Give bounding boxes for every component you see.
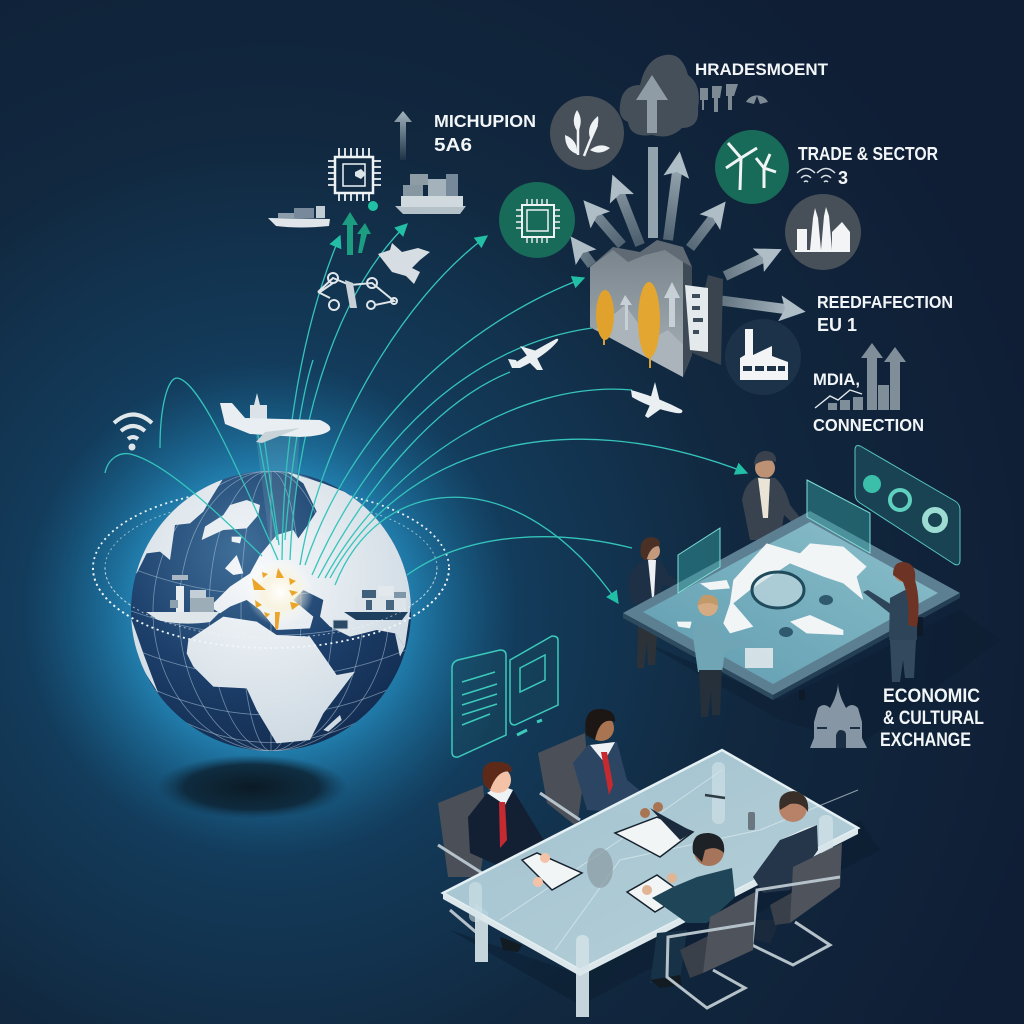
person: center businessman body — [573, 709, 660, 822]
network icon — [318, 273, 397, 310]
person: left businessman body — [468, 762, 563, 883]
person: front man — [642, 833, 735, 988]
person: center man — [692, 595, 752, 717]
icon: cargo ship top — [395, 174, 466, 214]
conference room floor shadow — [450, 820, 880, 1005]
icon: airplane over globe — [220, 393, 330, 443]
label: ECONOMIC & CULTURAL EXCHANGE: EXCHANGE — [880, 730, 971, 751]
label: HRADESMOENT: HRADESMOENT — [695, 60, 829, 79]
label: REEDFAFECTION — [817, 292, 953, 335]
globe cargo ship right — [333, 586, 408, 629]
circle icon: wheat — [550, 96, 624, 170]
label: REEDFAFECTION: EU 1 — [817, 315, 857, 335]
cloud with up arrow — [620, 55, 699, 136]
green arrows — [342, 212, 371, 255]
holographic panels — [678, 446, 960, 593]
documents on table — [522, 802, 693, 912]
icon: ship top left — [268, 206, 330, 228]
icon: chip outline — [328, 148, 381, 201]
label: MICHUPION — [434, 111, 536, 155]
holographic documents — [452, 636, 558, 757]
table lens — [745, 572, 833, 668]
bar chart label: MDIA CONNECTION — [813, 343, 924, 435]
table map land — [677, 543, 867, 635]
glass conference table — [443, 750, 858, 1017]
meeting table: map — [623, 511, 960, 700]
circle icon: wind turbine — [715, 130, 789, 204]
globe explosion highlight — [248, 568, 313, 630]
icon: wifi — [114, 414, 152, 450]
label: ECONOMIC & CULTURAL EXCHANGE: ECONOMIC — [883, 686, 980, 707]
airplane mid 2 — [631, 382, 682, 418]
airplane mid 1 — [508, 339, 558, 370]
chairs behind table — [438, 733, 587, 952]
label: ECONOMIC & CULTURAL EXCHANGE — [880, 686, 984, 751]
chair: front — [667, 892, 755, 1008]
teal dot — [368, 201, 378, 211]
person: right man — [753, 791, 818, 943]
circle icon: factory — [725, 319, 801, 395]
person: top presenter — [742, 451, 802, 540]
label: TRADE & SECTOR: TRADE & SECTOR — [798, 144, 938, 164]
bar chart label: MDIA CONNECTION: MDIA, — [813, 370, 860, 389]
label: REEDFAFECTION: REEDFAFECTION — [817, 292, 953, 312]
chair: right — [752, 843, 842, 965]
globe — [128, 471, 412, 751]
label: ECONOMIC & CULTURAL EXCHANGE: & CULTURAL — [883, 708, 984, 729]
label: MICHUPION: 5A6 — [434, 135, 472, 155]
orbit ring back — [93, 488, 449, 648]
orbit ring front — [93, 568, 449, 648]
globe halo — [20, 360, 520, 860]
globe grid — [131, 471, 411, 751]
radiating arrows — [583, 172, 785, 309]
vertical bar — [648, 147, 658, 238]
icon: cultural building — [810, 683, 867, 748]
circle icon: city — [785, 194, 861, 270]
central factory with wheat — [590, 240, 723, 377]
connection arcs — [105, 224, 747, 603]
label: TRADE & SECTOR — [797, 144, 938, 188]
person: right woman — [863, 562, 919, 682]
meeting table shadow — [640, 610, 1000, 745]
circle icon: chip green — [499, 182, 575, 258]
bar chart label: MDIA CONNECTION: CONNECTION — [813, 415, 924, 435]
globe light beam — [255, 430, 300, 560]
label: MICHUPION: MICHUPION — [434, 111, 536, 131]
label: TRADE & SECTOR: 3 — [838, 168, 848, 188]
label: HRADESMOENT — [695, 60, 829, 112]
globe land masses — [128, 472, 412, 743]
globe cargo ship left — [146, 575, 220, 624]
drone icon — [378, 243, 430, 284]
person: left woman — [628, 537, 677, 668]
globe shadow — [156, 755, 348, 819]
arrow up small — [394, 111, 412, 160]
